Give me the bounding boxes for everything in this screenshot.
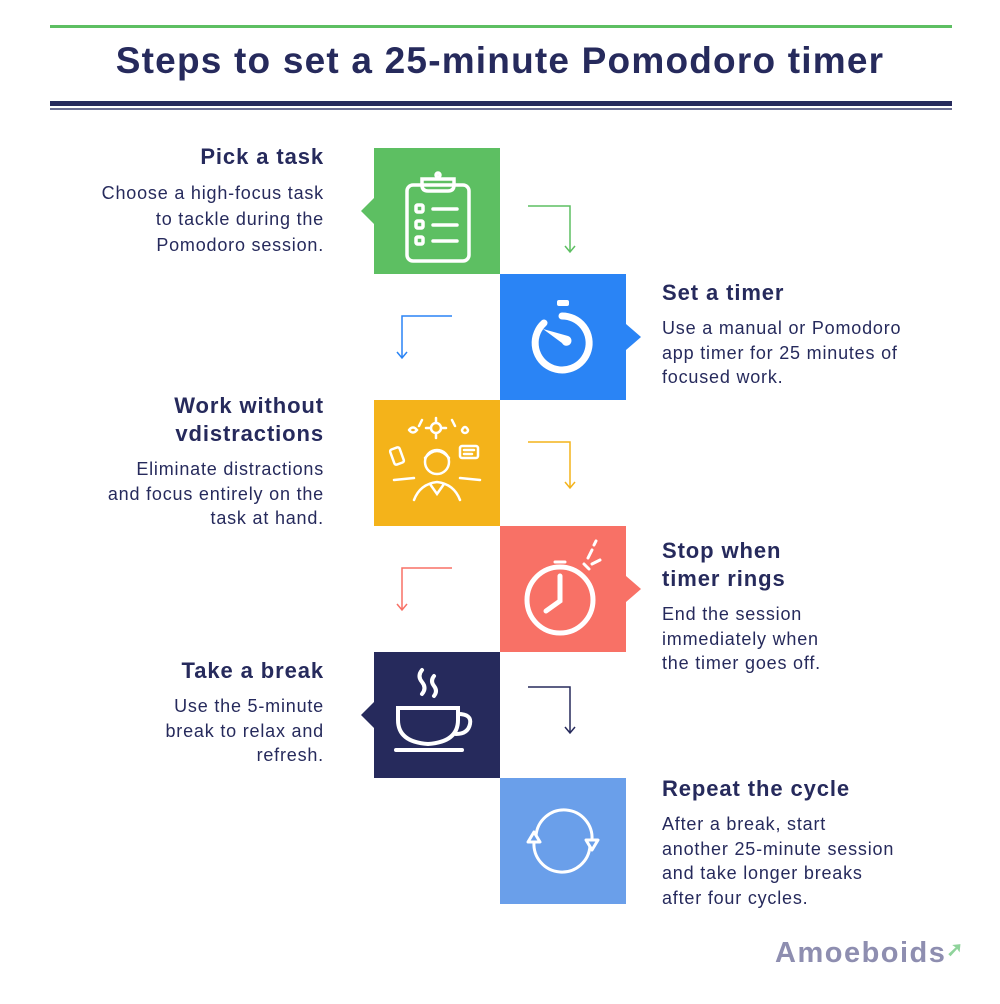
step 5 icon: coffee cup <box>361 652 500 778</box>
step 4 icon: ringing timer <box>500 526 641 652</box>
step 2 icon: stopwatch <box>500 274 641 400</box>
step 1 text: Choose a high-focus task <box>102 183 324 203</box>
arrow 2 <box>396 315 452 359</box>
step 2 text: Set a timer <box>662 280 784 305</box>
step 3 text <box>108 393 324 528</box>
step 1 icon: clipboard <box>361 148 500 274</box>
step 4 text: timer rings <box>662 566 786 591</box>
step 6 text: after four cycles. <box>662 888 808 908</box>
arrow 1 <box>528 205 576 253</box>
step 6 icon: cycle <box>500 778 626 904</box>
step 5 text: Use the 5-minute <box>174 696 324 716</box>
logo: Amoeboids➚ <box>775 937 965 969</box>
step 4 text <box>662 538 821 673</box>
arrow 5 <box>528 686 576 734</box>
step 1 text <box>102 144 324 255</box>
title: Steps to set a 25-minute Pomodoro timer <box>116 40 884 81</box>
step 2 text <box>662 280 901 387</box>
step 6 text: Repeat the cycle <box>662 776 850 801</box>
step 4 text: the timer goes off. <box>662 653 821 673</box>
step 1 text: Pick a task <box>200 144 324 169</box>
step 4 text: Stop when <box>662 538 781 563</box>
step 1 text: Pomodoro session. <box>156 235 324 255</box>
step 6 text: and take longer breaks <box>662 863 863 883</box>
step 4 text: End the session <box>662 604 802 624</box>
arrow 4 <box>396 567 452 611</box>
step 5 text: refresh. <box>257 745 324 765</box>
step 5 text: break to relax and <box>166 720 324 740</box>
step 5 text: Take a break <box>182 658 324 683</box>
step 3 icon: focused person <box>374 400 500 526</box>
step 2 text: Use a manual or Pomodoro <box>662 318 901 338</box>
step 6 text <box>662 776 894 908</box>
step 1 text: to tackle during the <box>156 209 324 229</box>
step 3 text: task at hand. <box>211 508 324 528</box>
step 3 text: vdistractions <box>175 421 324 446</box>
step 2 text: app timer for 25 minutes of <box>662 342 898 362</box>
step 3 text: and focus entirely on the <box>108 484 324 504</box>
step 5 text <box>166 658 324 765</box>
arrow 3 <box>528 441 576 489</box>
step 6 text: another 25-minute session <box>662 838 894 858</box>
step 3 text: Eliminate distractions <box>136 459 324 479</box>
step 2 text: focused work. <box>662 367 783 387</box>
step 4 text: immediately when <box>662 628 819 648</box>
step 3 text: Work without <box>174 393 324 418</box>
step 6 text: After a break, start <box>662 814 826 834</box>
